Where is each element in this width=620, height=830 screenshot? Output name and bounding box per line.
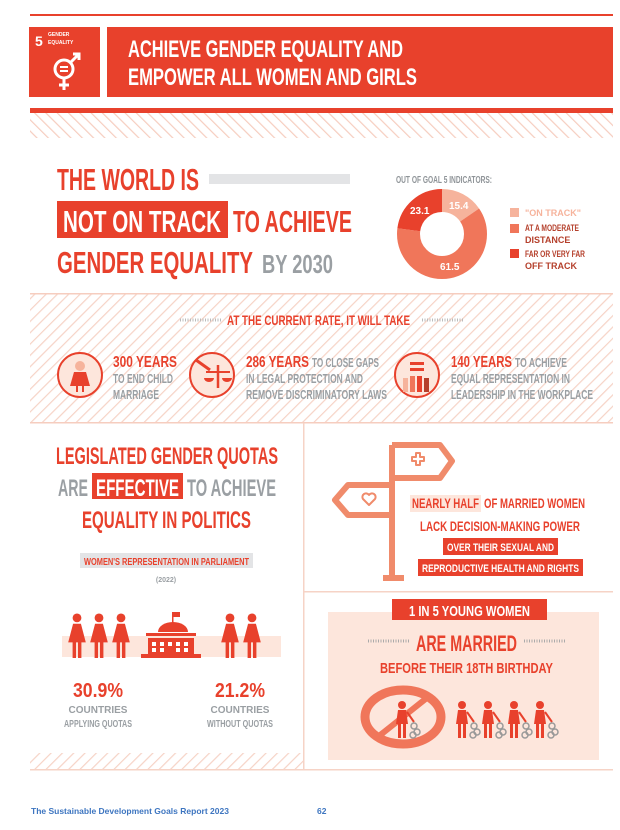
panel: child marriage: 1 IN 5 YOUNG WOMEN xyxy=(409,603,530,620)
panel: current rate: TO ACHIEVE xyxy=(515,355,567,370)
decision-making text: OVER THEIR SEXUAL AND xyxy=(447,542,554,554)
panel: quotas: WOMEN'S REPRESENTATION IN PARLIAMENT xyxy=(84,557,249,568)
headline: not on track xyxy=(57,162,352,280)
legend: OFF TRACK xyxy=(525,261,577,271)
title banner: EMPOWER ALL WOMEN AND GIRLS xyxy=(128,64,417,91)
panel: quotas: TO ACHIEVE xyxy=(187,475,276,502)
panel: quotas: 30.9% xyxy=(73,680,123,702)
panel: quotas: ARE xyxy=(58,475,88,502)
decision-making text xyxy=(410,495,585,576)
icon: gender equality symbol xyxy=(55,54,79,90)
top rule xyxy=(30,14,613,16)
title banner xyxy=(107,27,613,97)
panel: quotas: WITHOUT QUOTAS xyxy=(207,719,273,730)
headline: not on track: TO ACHIEVE xyxy=(233,204,352,239)
donut chart: 15.4 xyxy=(449,201,469,212)
panel: current rate: TO END CHILD xyxy=(113,371,173,386)
panel: current rate: REMOVE DISCRIMINATORY LAWS xyxy=(246,387,387,402)
goal badge xyxy=(29,27,100,97)
decision-making text: NEARLY HALF xyxy=(412,495,479,511)
icon: scales xyxy=(190,353,234,397)
panel: quotas: COUNTRIES xyxy=(211,705,270,716)
legend: FAR OR VERY FAR xyxy=(525,249,585,259)
donut chart: 61.5 xyxy=(440,262,460,273)
panel: current rate: 140 YEARS xyxy=(451,354,512,371)
footer xyxy=(31,806,327,816)
footer: 62 xyxy=(317,806,327,816)
panel: current rate: IN LEGAL PROTECTION AND xyxy=(246,371,363,386)
legend: DISTANCE xyxy=(525,235,570,245)
headline: not on track: BY 2030 xyxy=(262,249,333,279)
panel: current rate xyxy=(30,293,613,424)
panel: quotas: EQUALITY IN POLITICS xyxy=(82,507,251,534)
panel: current rate: AT THE CURRENT RATE, IT WILL TAKE xyxy=(227,312,410,328)
footer: The Sustainable Development Goals Report 2023 xyxy=(31,806,229,816)
panel: child marriage: ARE MARRIED xyxy=(416,631,517,656)
figures and parliament xyxy=(62,612,281,658)
icon: signpost xyxy=(335,445,452,578)
goal badge: EQUALITY xyxy=(48,40,74,46)
headline: not on track: NOT ON TRACK xyxy=(63,204,221,239)
panel: quotas xyxy=(56,443,281,730)
icon: equal representation xyxy=(395,353,439,397)
goal badge: 5 xyxy=(35,33,43,49)
title banner: ACHIEVE GENDER EQUALITY AND xyxy=(128,36,403,63)
panel: current rate: 286 YEARS xyxy=(246,354,309,371)
legend: "ON TRACK" xyxy=(525,208,581,218)
donut chart: OUT OF GOAL 5 INDICATORS: xyxy=(396,175,492,186)
panel: quotas: (2022) xyxy=(156,577,176,584)
panel: child marriage: BEFORE THEIR 18TH BIRTHDAY xyxy=(380,660,553,677)
headline: not on track: GENDER EQUALITY xyxy=(57,245,253,280)
donut chart: 23.1 xyxy=(410,206,430,217)
panel: current rate: MARRIAGE xyxy=(113,387,159,402)
panel: quotas: APPLYING QUOTAS xyxy=(64,719,132,730)
panel: current rate: TO CLOSE GAPS xyxy=(312,355,379,370)
legend: AT A MODERATE xyxy=(525,223,579,233)
panel: quotas: 21.2% xyxy=(215,680,265,702)
icon: ring with prohibited child xyxy=(365,690,441,744)
legend xyxy=(510,208,585,271)
panel: current rate: 300 YEARS xyxy=(113,354,177,371)
donut chart xyxy=(396,175,492,273)
panel: child marriage xyxy=(328,599,599,760)
icon: child bride xyxy=(58,353,102,397)
panel: quotas: COUNTRIES xyxy=(69,705,128,716)
panel: quotas: EFFECTIVE xyxy=(96,475,179,502)
panel: quotas: LEGISLATED GENDER QUOTAS xyxy=(56,443,278,470)
goal badge: GENDER xyxy=(48,32,70,38)
headline: not on track: THE WORLD IS xyxy=(57,162,199,197)
